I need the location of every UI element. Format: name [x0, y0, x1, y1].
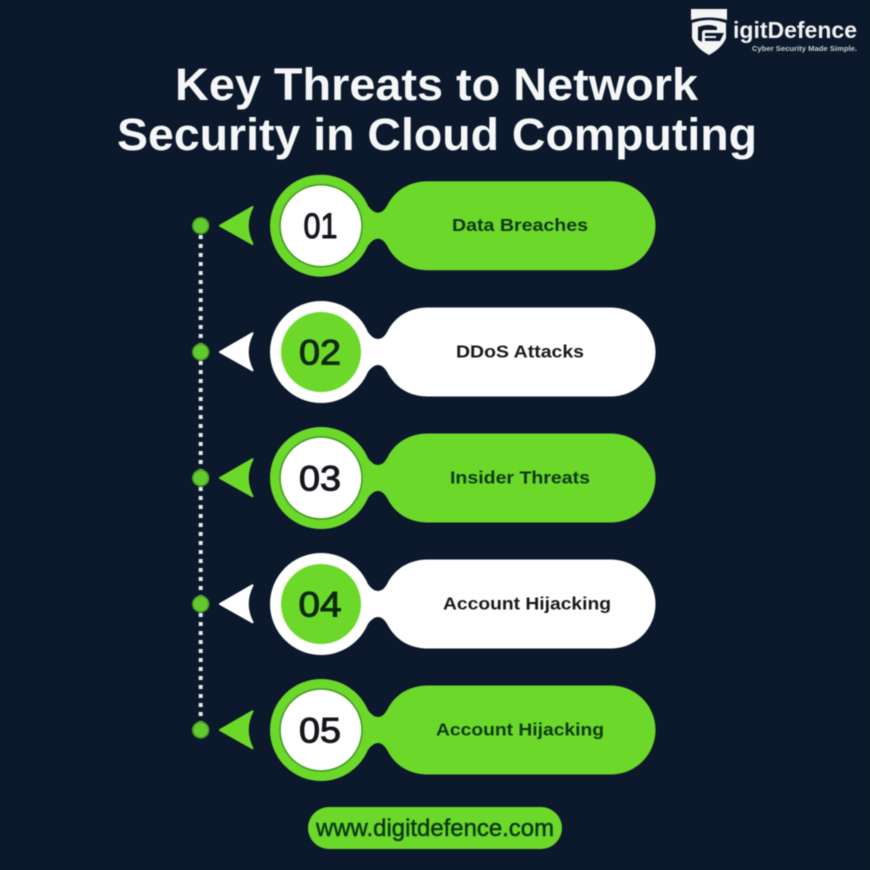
- logo wordmark: igitDefence: [733, 17, 857, 43]
- timeline node: [193, 344, 209, 360]
- logo tagline: Cyber Security Made Simple.: [752, 46, 857, 53]
- connected pill: [270, 301, 656, 403]
- title: Security in Cloud Computing: [117, 109, 757, 160]
- item 05: [193, 679, 655, 781]
- number: 02: [299, 334, 341, 372]
- connected pill: [270, 679, 656, 781]
- number circle: [280, 185, 362, 267]
- number circle: [280, 689, 362, 771]
- title: [117, 59, 757, 160]
- arrow: [220, 711, 252, 748]
- item 02: [193, 301, 655, 403]
- number circle: [281, 312, 361, 392]
- number: 05: [299, 712, 341, 750]
- number circle: [281, 564, 361, 644]
- timeline node: [193, 596, 209, 612]
- connected pill: [270, 175, 656, 277]
- number: 03: [299, 460, 341, 498]
- number circle: [280, 437, 362, 519]
- timeline node: [193, 218, 209, 234]
- number: 01: [304, 207, 338, 246]
- number: 04: [298, 586, 342, 624]
- item 01: [193, 175, 655, 277]
- logo: DigitDefence: [691, 9, 857, 55]
- arrow: [220, 459, 252, 496]
- connected pill: [270, 553, 656, 655]
- icon: shield: [691, 9, 727, 55]
- item 04: [193, 553, 655, 655]
- title: Key Threats to Network: [175, 59, 699, 110]
- timeline node: [193, 722, 209, 738]
- arrow: [220, 333, 252, 370]
- label: DDoS Attacks: [456, 342, 584, 362]
- website badge: [308, 807, 562, 849]
- connected pill: [270, 427, 656, 529]
- label: Data Breaches: [452, 215, 588, 235]
- label: Account Hijacking: [443, 594, 611, 614]
- arrow: [220, 585, 252, 622]
- label: Insider Threats: [450, 468, 590, 488]
- timeline dotted line: [199, 226, 203, 730]
- arrow: [220, 207, 252, 244]
- timeline node: [193, 470, 209, 486]
- label: Account Hijacking: [436, 720, 604, 740]
- item 03: [193, 427, 655, 529]
- website badge: www.digitdefence.com: [315, 815, 554, 842]
